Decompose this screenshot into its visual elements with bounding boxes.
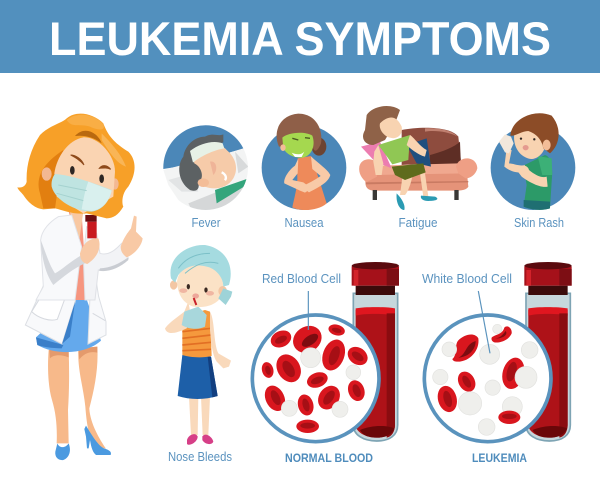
label: white blood cell: White Blood Cell xyxy=(422,272,512,286)
symptom: fever xyxy=(163,125,252,230)
label: fever: Fever xyxy=(192,216,220,230)
label: normal blood: NORMAL BLOOD xyxy=(285,453,373,465)
leukemia pointer line xyxy=(478,291,490,353)
symptom: skin rash xyxy=(491,113,575,230)
lab coat lower part xyxy=(25,280,106,344)
label: fatigue: Fatigue xyxy=(398,216,438,230)
leukemia test tube xyxy=(524,262,572,441)
abnormal red cells xyxy=(435,326,528,424)
pointer line xyxy=(307,291,310,330)
label: leukemia: LEUKEMIA xyxy=(472,453,527,465)
leukemia white cells xyxy=(433,324,538,435)
blood test tube xyxy=(352,262,399,441)
fever background circle xyxy=(163,125,243,169)
leukemia panel xyxy=(422,262,572,465)
leukemia magnifier circle xyxy=(424,315,551,442)
sofa xyxy=(359,128,477,200)
white cell behind xyxy=(502,397,522,417)
nausea background circle xyxy=(262,125,346,210)
symptom: fatigue xyxy=(359,106,477,230)
doctor illustration xyxy=(17,114,143,460)
symptom: nausea xyxy=(262,114,346,230)
title banner xyxy=(0,0,600,73)
magnifier circle xyxy=(252,315,379,442)
label: nose bleeds: Nose Bleeds xyxy=(168,450,232,464)
title banner: LEUKEMIA SYMPTOMS xyxy=(49,13,551,66)
skin rash background circle xyxy=(491,125,575,210)
normal blood panel xyxy=(252,262,399,465)
label: nausea: Nausea xyxy=(284,216,324,230)
white blood cells xyxy=(281,348,361,417)
label: red blood cell: Red Blood Cell xyxy=(262,272,341,286)
red blood cells xyxy=(260,320,371,433)
symptom: nose bleeds xyxy=(165,245,232,464)
label: skin rash: Skin Rash xyxy=(514,216,564,230)
